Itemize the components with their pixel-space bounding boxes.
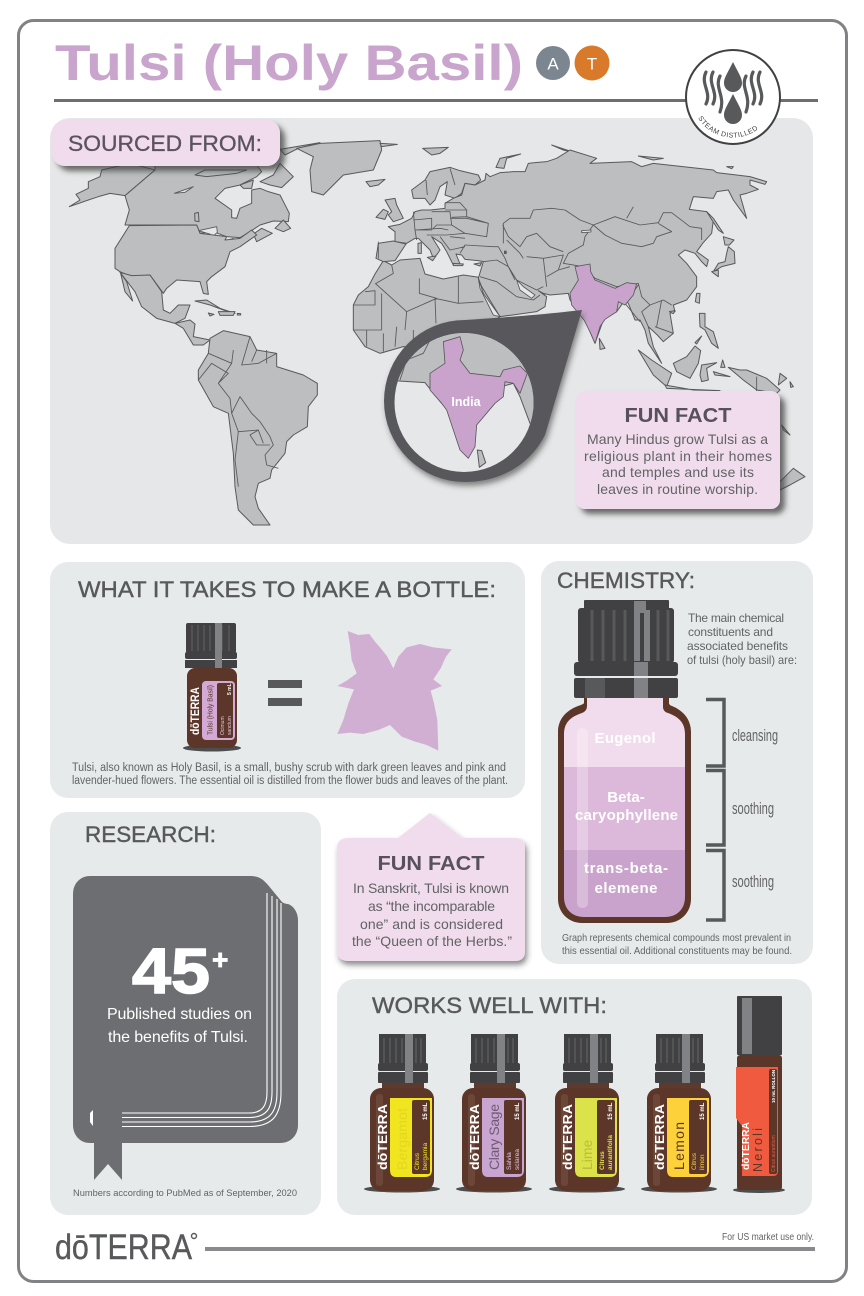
icon: aromatic and topical badges (536, 46, 610, 80)
icon: equals sign (268, 680, 302, 706)
stat text: the benefits of Tulsi. (108, 1029, 248, 1046)
bottle: Bergamot: Citrus (414, 1152, 421, 1170)
bottle: Lemon: Citrus (691, 1152, 698, 1170)
map label: India: India (451, 395, 482, 409)
icon: tulsi 5 mL bottle: Tulsi (Holy Basil) (206, 685, 214, 735)
bracket: soothing: soothing (732, 799, 774, 818)
intro text (687, 611, 797, 667)
map callout: magnifier on India (384, 310, 582, 482)
header rule (54, 99, 818, 102)
footer note: For US market use only. (722, 1232, 814, 1243)
callout: fun fact Sanskrit: one” and is considered (360, 916, 503, 932)
intro text: associated benefits (687, 639, 788, 653)
map: India, Southeast Asia and islands (570, 212, 864, 463)
map: Europe, Africa and Asia (353, 145, 767, 363)
footer logo: dōTERRA (55, 1228, 193, 1267)
bottle: Lime: dōTERRA (560, 1103, 575, 1170)
callout: fun fact India: religious plant in their homes (584, 448, 772, 464)
bottle: Lemon: Lemon (671, 1122, 687, 1170)
bottle: Bergamot: 15 mL (423, 1102, 429, 1120)
bottle: Lime: aurantifolia (607, 1135, 614, 1170)
chart label: Beta-caryophyllene: caryophyllene (575, 807, 678, 824)
chart label: Beta-caryophyllene: Beta- (607, 789, 645, 806)
callout: sourced from tag: SOURCED FROM: (68, 131, 262, 156)
intro text: constituents and (688, 625, 773, 639)
panel: what it takes to make a bottle (50, 562, 525, 798)
chart label: trans-beta-elemene: trans-beta- (584, 860, 668, 877)
footnote: this essential oil. Additional constituents may be found. (562, 945, 792, 957)
bottle: Neroli roller: 10 mL ROLLON (771, 1070, 776, 1103)
callout: fun fact Sanskrit: In Sanskrit, Tulsi is known (353, 880, 509, 896)
bracket: cleansing: cleansing (732, 726, 778, 745)
footer rule (205, 1247, 815, 1251)
bottle: Lemon: dōTERRA (652, 1103, 667, 1170)
stat text (107, 1006, 252, 1046)
icon: tulsi 5 mL bottle: dōTERRA (190, 687, 202, 735)
bottle: Neroli roller: dōTERRA (741, 1122, 752, 1170)
callout: fun fact India: FUN FACT (624, 405, 732, 427)
footnote: Numbers according to PubMed as of September, 2020 (73, 1188, 297, 1199)
bottle: Lemon (641, 1034, 717, 1192)
bracket: cleansing (706, 700, 778, 766)
chart label: Eugenol: Eugenol (594, 730, 656, 747)
intro text: of tulsi (holy basil) are: (687, 653, 797, 667)
callout: fun fact India (576, 391, 780, 509)
intro text: The main chemical (688, 611, 784, 625)
bottle: Neroli roller: Citrus aurantium (771, 1135, 777, 1172)
callout: fun fact Sanskrit: the “Queen of the Herbs.” (352, 933, 512, 949)
icon: book (73, 876, 298, 1180)
bracket: soothing (706, 770, 774, 845)
bottle: Clary Sage: dōTERRA (467, 1103, 482, 1170)
title: Tulsi (Holy Basil) (55, 35, 523, 91)
heading: WHAT IT TAKES TO MAKE A BOTTLE: (78, 577, 496, 602)
heading: WORKS WELL WITH: (372, 993, 607, 1018)
map: Australasia edges (778, 425, 805, 490)
bottle: Lemon: limon (699, 1154, 706, 1170)
bottle: Lemon: 15 mL (700, 1102, 706, 1120)
chart label: trans-beta-elemene (584, 860, 668, 897)
callout: fun fact India: Many Hindus grow Tulsi as a (587, 431, 768, 447)
icon: steam distilled badge (685, 49, 781, 145)
bracket: soothing (706, 850, 774, 920)
map: Greenland, Central and South America (175, 141, 397, 525)
callout: sourced from tag (52, 120, 280, 166)
panel: research (50, 812, 321, 1215)
panel: works well with (337, 979, 812, 1215)
body text: lavender-hued flowers. The essential oil is distilled from the flower buds and leaves of the plant. (72, 775, 508, 787)
bottle: Clary Sage: sclarea (514, 1149, 521, 1170)
callout: fun fact India: and temples and use its (602, 464, 754, 480)
stat text: Published studies on (107, 1006, 252, 1023)
icon: steam distilled badge: STEAM DISTILLED (698, 116, 757, 138)
icon: tulsi 5 mL bottle: sanctum (227, 716, 233, 735)
icon: aromatic and topical badges: T (587, 54, 597, 74)
callout: fun fact India: leaves in routine worship. (597, 481, 758, 497)
bottle: Clary Sage: 15 mL (515, 1102, 521, 1120)
bottle: Clary Sage: Clary Sage (486, 1104, 502, 1170)
stat: 45+: 45 (132, 935, 210, 1007)
chart label: Beta-caryophyllene (575, 789, 678, 824)
map: North America (69, 163, 293, 323)
bottle: Clary Sage (456, 1034, 532, 1192)
footnote (562, 932, 792, 957)
chart: bottle of chemical constituents (558, 600, 691, 923)
panel: chemistry (541, 561, 813, 964)
bottle: Bergamot: bergamia (422, 1143, 429, 1170)
panel: sourced from map (50, 118, 864, 544)
icon: basil leaves (337, 631, 452, 751)
bottle: Lime: Citrus (599, 1151, 606, 1170)
bottle: Lime: Lime (579, 1139, 595, 1170)
bottle: Bergamot: Bergamot (394, 1108, 410, 1170)
icon: aromatic and topical badges: A (547, 54, 559, 74)
icon: tulsi 5 mL bottle: 5 mL (227, 683, 233, 695)
bottle: Clary Sage: Salvia (506, 1152, 513, 1170)
body text: Tulsi, also known as Holy Basil, is a small, bushy scrub with dark green leaves and pink and (72, 762, 506, 774)
bottle: Neroli roller: Neroli (751, 1128, 765, 1172)
heading: RESEARCH: (85, 822, 216, 847)
bottle: Lime: 15 mL (608, 1102, 614, 1120)
icon: tulsi 5 mL bottle (183, 623, 241, 752)
bottle: Bergamot: dōTERRA (375, 1103, 390, 1170)
callout: fun fact Sanskrit (337, 813, 525, 961)
bottle: Bergamot (364, 1034, 440, 1192)
callout: fun fact Sanskrit: as “the incomparable (368, 898, 495, 914)
icon: tulsi 5 mL bottle: Ocimum (220, 716, 226, 735)
heading: CHEMISTRY: (557, 568, 695, 593)
bracket: soothing: soothing (732, 872, 774, 891)
stat: 45+: + (212, 944, 228, 975)
callout: fun fact Sanskrit: FUN FACT (378, 853, 484, 875)
bottle: Neroli roller (733, 996, 785, 1193)
chart label: trans-beta-elemene: elemene (594, 880, 658, 897)
footnote: Graph represents chemical compounds most prevalent in (562, 932, 791, 944)
bottle: Lime (549, 1034, 625, 1192)
body text (72, 762, 508, 787)
